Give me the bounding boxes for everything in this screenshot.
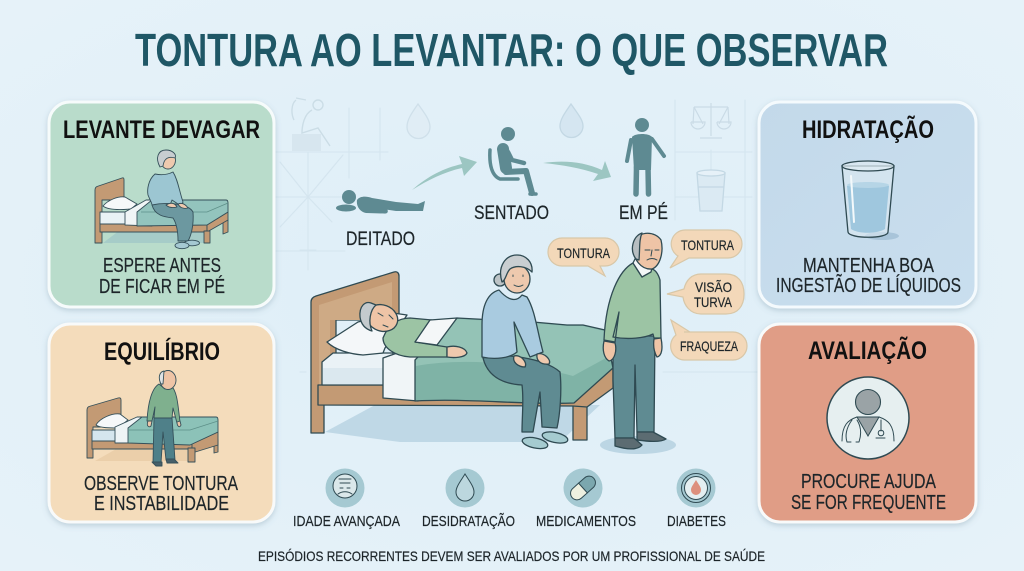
sheet fold [383,352,418,401]
shoes [615,432,666,449]
blanket top plane [416,319,606,376]
callout: visão turva: VISÃO [695,279,732,295]
trousers [483,356,561,432]
sweater [482,290,543,358]
bed post [573,405,587,440]
arrow: deitado to sentado [412,156,477,190]
callout: fraqueza: FRAQUEZA [680,338,738,354]
text: observe tontura e instabilidade: E INSTABILIDADE [94,493,229,515]
icon: person lying down [336,190,425,214]
arrow: sentado to em pé [543,161,611,181]
panel: hidratação [759,102,976,307]
illustration: man standing beside bed [87,370,218,466]
text: mantenha boa ingestão de líquidos: INGESTÃO DE LÍQUIDOS [776,273,961,297]
text: observe tontura e instabilidade: OBSERVE TONTURA [84,473,239,495]
icon: capsule [555,460,611,516]
callout: tontura right [670,230,742,268]
woman hair [501,255,532,282]
hands [514,354,550,367]
man face [645,250,659,260]
label: sentado: SENTADO [474,203,549,224]
label: em pé: EM PÉ [619,203,668,224]
background icon: water drop right [560,104,583,138]
bun [494,274,506,286]
left slipper [521,435,549,451]
panel: levante devagar [49,102,274,307]
callout: tontura left: TONTURA [557,245,611,261]
sweater [604,263,661,342]
pillow [327,313,407,355]
text: espere antes de ficar em pé: ESPERE ANTES [103,255,221,277]
woman face [513,275,523,286]
bed frame [318,366,613,407]
illustration: woman seated on bed [95,150,228,249]
risk factor: medicamentos [536,460,636,530]
patient face [378,313,393,327]
icon: doctor [827,377,909,459]
bed shadow [325,405,600,442]
heading: avaliação: AVALIAÇÃO [808,335,927,365]
background icon: balance scale [691,103,731,138]
faint background pattern [276,100,758,372]
woman head [504,265,530,293]
mattress [322,353,393,385]
headboard inner panel [319,282,392,385]
label: medicamentos: MEDICAMENTOS [536,513,636,530]
icon: elderly face [326,468,364,508]
illustration: standing man [600,233,676,454]
label: diabetes: DIABETES [667,513,726,530]
collar [633,257,652,277]
text: mantenha boa ingestão de líquidos [776,255,961,297]
risk factor: diabetes [667,468,726,530]
footer note: EPISÓDIOS RECORRENTES DEVEM SER AVALIADOS POR UM PROFISSIONAL DE SAÚDE [258,548,765,564]
heading: equilíbrio: EQUILÍBRIO [104,337,220,366]
mattress shade [323,368,384,384]
icon: person seated [490,127,536,194]
callout: visão turva: TURVA [694,294,733,310]
risk factor: idade avançada [293,468,400,530]
label: idade avançada: IDADE AVANÇADA [293,513,400,530]
background icon: water drop left [407,104,430,138]
heading: hidratação: HIDRATAÇÃO [802,114,934,144]
hand [447,346,467,358]
text: espere antes de ficar em pé [99,255,225,298]
text: espere antes de ficar em pé: DE FICAR EM PÉ [99,275,225,298]
label: deitado: DEITADO [346,229,415,250]
man hair [632,233,642,260]
panel: avaliação [759,324,976,522]
callout: tontura right: TONTURA [681,237,735,253]
callout: fraqueza [671,320,747,360]
panel: equilíbrio [49,324,274,522]
background icon: sitting figure [292,98,330,151]
heading: levante devagar: LEVANTE DEVAGAR [63,116,260,144]
right slipper [541,430,569,445]
callout: tontura left [548,238,619,276]
hands [603,338,662,361]
shadow [600,436,676,454]
text: observe tontura e instabilidade [84,473,239,515]
patient head [363,300,401,336]
background icon: glass of water [697,170,725,211]
illustration: seated woman [482,255,569,451]
icon: glass of water [842,161,899,240]
icon: water drop [446,468,484,508]
illustration: large bed with patient [311,272,613,442]
callout: visão turva [667,274,744,314]
trousers [613,336,655,438]
icon: person standing [627,118,664,194]
headboard [311,272,399,433]
blanket [415,318,613,403]
patient torso and arm [383,318,447,357]
man head [633,233,662,269]
icon: blood drop [676,468,716,508]
text: procure ajuda se for frequente: SE FOR FREQUENTE [791,492,946,514]
risk factor: desidratação [422,468,515,530]
label: desidratação: DESIDRATAÇÃO [422,513,515,530]
fold of white sheet [415,318,457,345]
text: procure ajuda se for frequente: PROCURE AJUDA [801,471,937,493]
text: mantenha boa ingestão de líquidos: MANTENHA BOA [803,255,935,277]
patient hair [360,303,376,331]
text: procure ajuda se for frequente [791,471,946,514]
